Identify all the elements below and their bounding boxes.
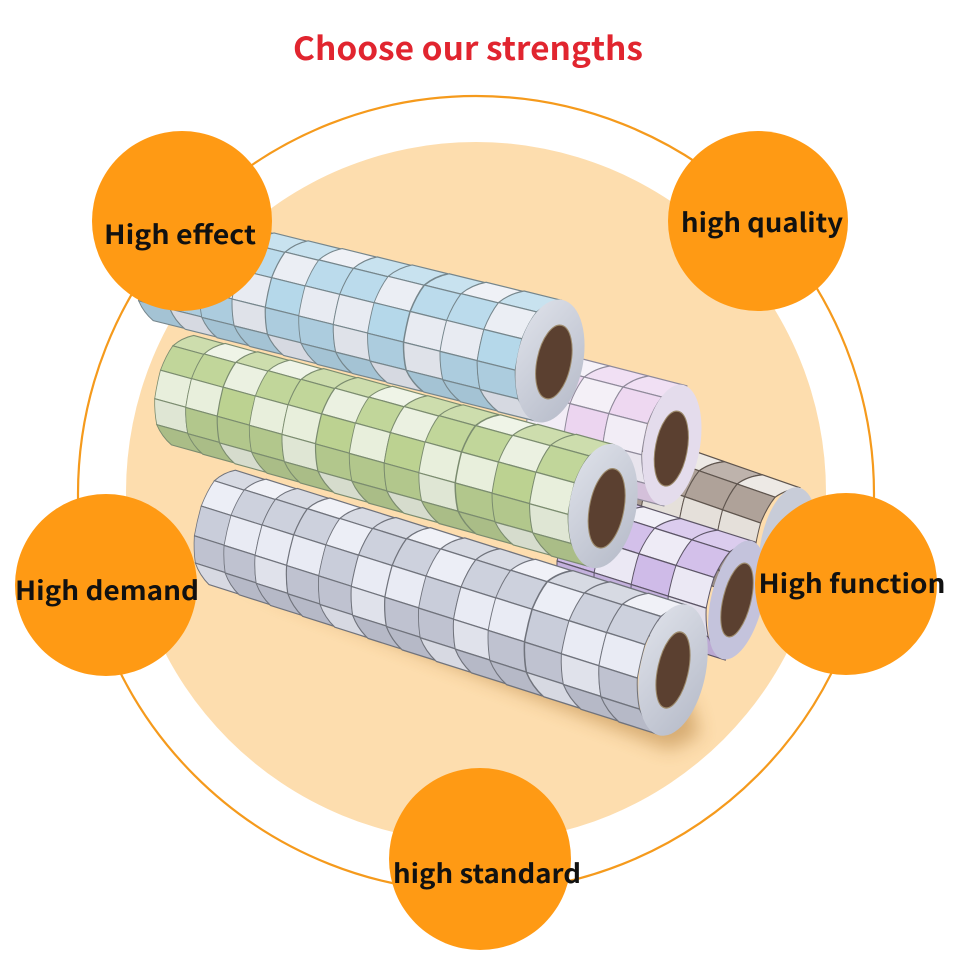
badge: high effect xyxy=(92,131,272,311)
product: brown roll xyxy=(593,424,827,617)
badge: high effect: High effect xyxy=(104,215,256,252)
badge: high standard: high standard xyxy=(393,854,581,891)
title: Choose our strengths xyxy=(293,24,643,70)
shadow under front roll xyxy=(205,570,700,750)
product: purple roll xyxy=(546,485,777,667)
background disc xyxy=(126,142,826,842)
badge: high demand xyxy=(15,494,199,676)
badge: high function: High function xyxy=(758,564,946,601)
badge: high quality xyxy=(668,131,848,311)
badge: high function xyxy=(755,493,946,675)
product: blue roll xyxy=(127,198,595,430)
product: grey roll xyxy=(183,455,719,745)
outer orange ring xyxy=(78,96,874,892)
product: green roll xyxy=(145,322,648,576)
badge: high standard xyxy=(389,768,581,950)
badge: high demand: High demand xyxy=(15,571,199,608)
product: pink roll xyxy=(517,348,711,512)
badge: high quality: high quality xyxy=(681,203,843,240)
